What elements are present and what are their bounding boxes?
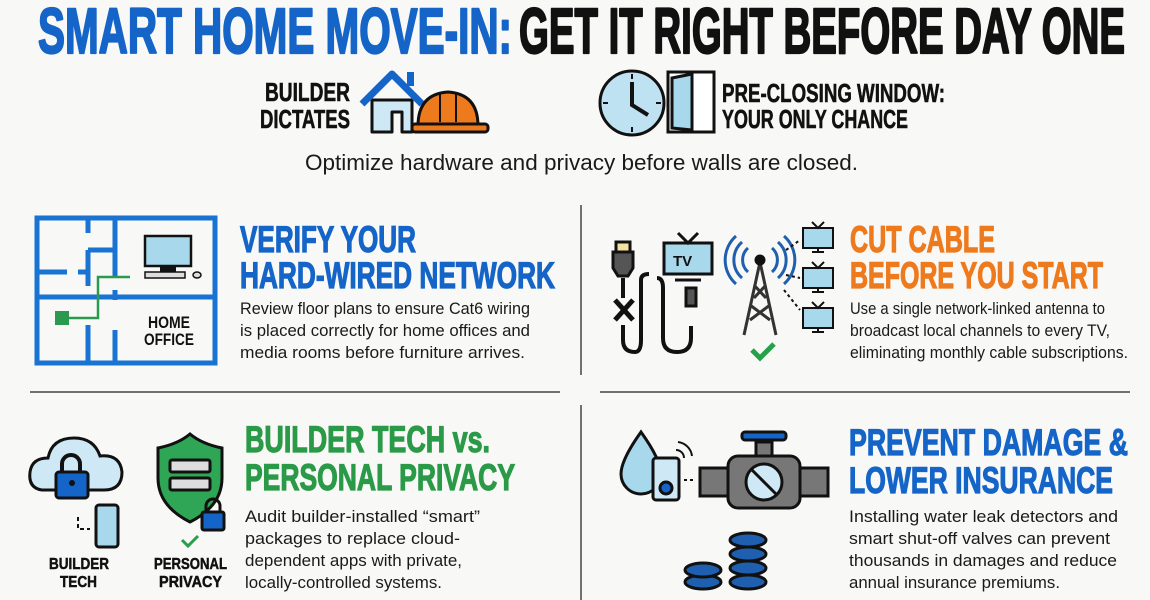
label: pre-closing window: PRE-CLOSING WINDOW: xyxy=(722,78,945,108)
body text: media rooms before furniture arrives. xyxy=(240,343,525,362)
icon: water detector, valve, coins xyxy=(621,432,828,589)
heading: CUT CABLE xyxy=(850,219,995,260)
heading xyxy=(849,422,1128,501)
subtitle: Optimize hardware and privacy before walls are closed. xyxy=(305,150,858,175)
body text: thousands in damages and reduce xyxy=(849,551,1117,570)
body text: annual insurance premiums. xyxy=(849,573,1060,592)
icon: cloud lock and shield xyxy=(30,434,224,547)
body text xyxy=(240,299,530,362)
body text: eliminating monthly cable subscriptions. xyxy=(850,343,1128,362)
panel: builder tech vs privacy xyxy=(30,419,515,592)
heading: HARD-WIRED NETWORK xyxy=(240,255,555,296)
heading: VERIFY YOUR xyxy=(240,219,416,260)
body text xyxy=(245,507,480,592)
title xyxy=(38,0,1125,67)
body text xyxy=(850,299,1128,362)
panel: builder tech vs privacy: TECH xyxy=(60,574,97,591)
dividers xyxy=(30,205,1130,600)
panel: prevent damage xyxy=(621,422,1128,592)
panel: cut cable xyxy=(613,219,1128,362)
body text: packages to replace cloud- xyxy=(245,529,460,548)
heading: PERSONAL PRIVACY xyxy=(245,457,515,498)
panel: builder tech vs privacy: BUILDER xyxy=(49,556,109,573)
body text: locally-controlled systems. xyxy=(245,573,442,592)
icon: floor plan: OFFICE xyxy=(144,330,194,349)
label: builder dictates: BUILDER xyxy=(265,77,350,107)
icon: floor plan: HOME xyxy=(148,313,190,332)
heading xyxy=(245,419,515,498)
body text: Use a single network-linked antenna to xyxy=(850,299,1105,318)
panel: hard-wired network xyxy=(37,218,555,363)
label: pre-closing window xyxy=(722,78,945,134)
icon: cable and antenna xyxy=(613,222,833,358)
icon: clock and open window xyxy=(600,71,714,135)
label: builder dictates: DICTATES xyxy=(260,104,350,134)
icon: floor plan xyxy=(37,218,215,363)
icon: cable and antenna: TV xyxy=(673,253,692,270)
body text xyxy=(849,507,1118,592)
body text: broadcast local channels to every TV, xyxy=(850,321,1110,340)
body text: is placed correctly for home offices and xyxy=(240,321,530,340)
heading: BUILDER TECH vs. xyxy=(245,419,490,460)
panel: builder tech vs privacy: PRIVACY xyxy=(159,574,222,591)
label: builder dictates xyxy=(260,77,350,134)
body text: Review floor plans to ensure Cat6 wiring xyxy=(240,299,530,318)
panel: builder tech vs privacy: PERSONAL xyxy=(154,556,227,573)
icon: house and hard hat xyxy=(362,72,488,132)
label: pre-closing window: YOUR ONLY CHANCE xyxy=(722,104,908,134)
body text: Installing water leak detectors and xyxy=(849,507,1118,526)
heading xyxy=(850,219,1103,296)
body text: Audit builder-installed “smart” xyxy=(245,507,480,526)
body text: dependent apps with private, xyxy=(245,551,462,570)
body text: smart shut-off valves can prevent xyxy=(849,529,1110,548)
heading xyxy=(240,219,555,296)
